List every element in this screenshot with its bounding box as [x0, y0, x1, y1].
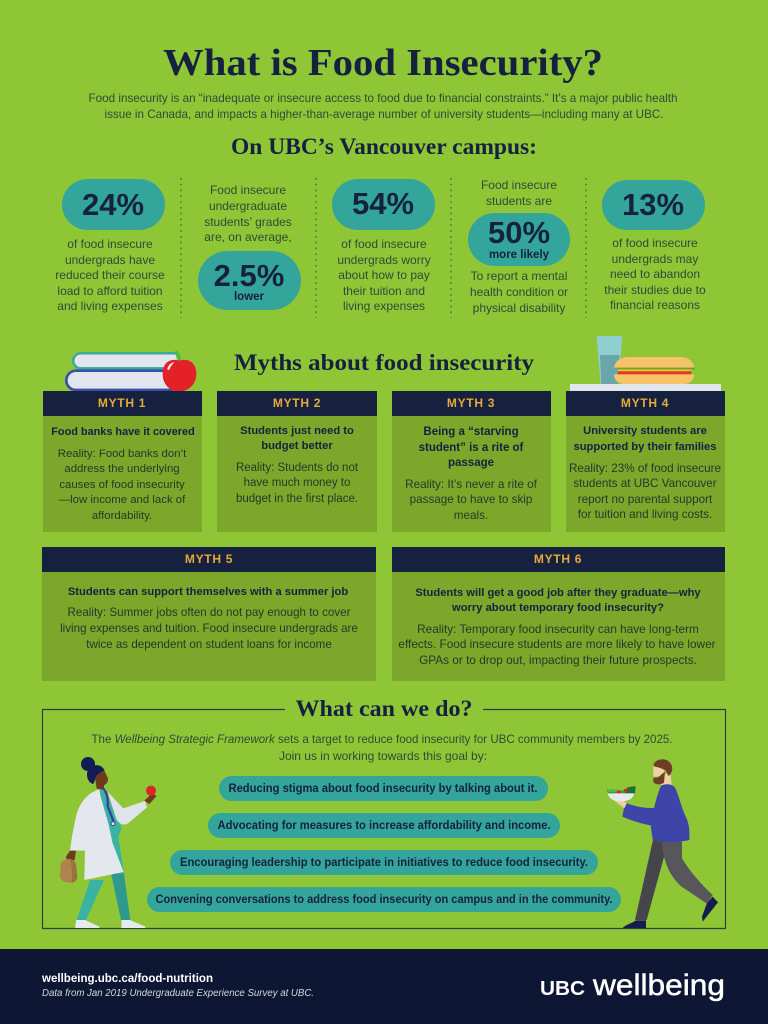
- panel: myth 3: MYTH 3: [447, 396, 495, 410]
- panel: myth 5: MYTH 5: [185, 552, 233, 566]
- stat: 2.5%: undergraduate: [209, 199, 287, 213]
- stat: 2.5%: students’ grades: [204, 215, 292, 229]
- action pill 2: Advocating for measures to increase affordability and income.: [218, 820, 550, 832]
- action pill 3: [170, 850, 598, 875]
- panel: myth 2: budget better: [261, 440, 333, 452]
- panel: myth 1: MYTH 1: [98, 396, 146, 410]
- panel: myth 2: have much money to: [244, 477, 350, 489]
- stat: 50%: Food insecure: [481, 178, 557, 192]
- stat: 24%: and living expenses: [57, 299, 163, 313]
- stat: 24%: undergrads have: [65, 253, 155, 267]
- stat: 13%: of food insecure: [612, 236, 698, 250]
- panel: myth 4: supported by their families: [574, 441, 716, 453]
- stat: 54%: living expenses: [343, 299, 425, 313]
- heading: what can we do: What can we do?: [296, 696, 472, 721]
- stat: 50%: 50%: [488, 215, 550, 250]
- intro text: issue in Canada, and impacts a higher-than-average number of university students—including many at UBC.: [104, 107, 664, 121]
- stat: 13%: 13%: [622, 187, 684, 222]
- stat: 2.5%: Food insecure: [210, 183, 286, 197]
- panel: myth 6: GPAs or to drop out, impacting their future prospects.: [419, 653, 697, 667]
- footer text: Data from Jan 2019 Undergraduate Experience Survey at UBC.: [42, 988, 314, 999]
- panel: myth 4: University students are: [583, 425, 707, 437]
- logo: UBC wellbeing: wellbeing: [592, 969, 725, 1002]
- stat: 2.5%: 2.5%: [214, 258, 284, 293]
- panel: myth 2: budget in the first place.: [236, 493, 358, 505]
- panel: myth 4: report no parental support: [578, 493, 713, 506]
- panel: myth 1: Reality: Food banks don’t: [58, 448, 187, 460]
- stat: 54%: [332, 179, 435, 313]
- logo: UBC wellbeing: [540, 969, 725, 1002]
- panel: myth 1: —low income and lack of: [59, 494, 186, 506]
- illustration: man carrying salad: [607, 759, 718, 928]
- action pill 2: [208, 813, 560, 838]
- action pill 4: [147, 887, 621, 912]
- panel: myth 3: passage to have to skip: [410, 493, 533, 506]
- icon: books and apple: [66, 350, 196, 391]
- stat: 13%: need to abandon: [610, 267, 700, 281]
- stat: 24%: of food insecure: [67, 237, 153, 251]
- panel: myth 3: [392, 391, 551, 532]
- stat: 13%: undergrads may: [612, 252, 698, 266]
- action pill 1: Reducing stigma about food insecurity by talking about it.: [228, 783, 538, 795]
- stat: 13%: [602, 180, 706, 312]
- heading: campus: On UBC’s Vancouver campus:: [231, 134, 537, 159]
- panel: myth 1: affordability.: [92, 510, 152, 522]
- panel: myth 3: Being a “starving: [423, 426, 519, 438]
- text: framework intro: The Wellbeing Strategic Framework sets a target to reduce food insecurity for UBC community members by 2025.: [92, 732, 672, 746]
- panel: myth 5: [42, 547, 376, 681]
- action pill 3: Encouraging leadership to participate in initiatives to reduce food insecurity.: [180, 857, 588, 869]
- stat: 50%: health condition or: [470, 285, 568, 299]
- stat: 50%: [468, 178, 570, 315]
- panel frame: what can we do: [42, 710, 726, 928]
- text: framework intro: Join us in working towards this goal by:: [279, 749, 487, 763]
- illustration: woman in lab coat: [60, 757, 157, 928]
- panel: myth 1: Food banks have it covered: [51, 426, 195, 438]
- panel: myth 6: effects. Food insecure students are more likely to have lower: [398, 637, 716, 651]
- stat: 24%: [55, 179, 165, 313]
- stat: 50%: physical disability: [473, 301, 565, 315]
- stat: 50%: To report a mental: [471, 269, 567, 283]
- panel: myth 2: Students just need to: [240, 425, 354, 437]
- panel: myth 3: student” is a rite of: [419, 442, 524, 454]
- stat: 13%: financial reasons: [610, 298, 700, 312]
- panel: myth 3: meals.: [454, 509, 488, 522]
- stat: 50%: more likely: [489, 249, 550, 261]
- intro text: [88, 91, 678, 121]
- stat: 54%: 54%: [352, 186, 414, 221]
- panel: myth 3: passage: [448, 457, 494, 469]
- panel: myth 4: [566, 391, 725, 532]
- intro text: Food insecurity is an “inadequate or insecure access to food due to financial constraints.” It’s a major public health: [88, 91, 678, 105]
- panel: myth 4: Reality: 23% of food insecure: [569, 462, 721, 475]
- stat: 54%: undergrads worry: [337, 253, 431, 267]
- title: What is Food Insecurity?: [163, 42, 603, 84]
- panel: myth 6: Reality: Temporary food insecurity can have long-term: [417, 622, 699, 636]
- panel: myth 4: for tuition and living costs.: [578, 508, 712, 521]
- panel: myth 4: students at UBC Vancouver: [573, 477, 717, 490]
- panel: myth 1: causes of food insecurity: [59, 479, 185, 491]
- panel: myth 5: Reality: Summer jobs often do not pay enough to cover: [68, 606, 351, 619]
- footer text: [41, 971, 314, 999]
- stat: 24%: reduced their course: [55, 268, 165, 282]
- panel: myth 4: MYTH 4: [621, 396, 669, 410]
- panel: myth 1: [43, 391, 202, 532]
- panel: myth 5: Students can support themselves with a summer job: [68, 586, 348, 598]
- panel: myth 5: living expenses and tuition. Food insecure undergrads are: [60, 622, 358, 635]
- stat: 54%: their tuition and: [343, 284, 425, 298]
- stat: 24%: load to afford tuition: [57, 284, 163, 298]
- action pill 1: [219, 776, 548, 801]
- panel: myth 2: MYTH 2: [273, 396, 321, 410]
- panel: myth 6: MYTH 6: [534, 552, 582, 566]
- panel: myth 2: [217, 391, 377, 532]
- stat: 2.5%: lower: [234, 291, 265, 303]
- panel: myth 1: address the underlying: [64, 463, 180, 475]
- logo: UBC wellbeing: UBC: [540, 978, 585, 1000]
- panel: myth 6: worry about temporary food insecurity?: [451, 602, 664, 614]
- heading: myths: Myths about food insecurity: [234, 350, 535, 375]
- footer band: [0, 949, 768, 1024]
- stat: 13%: their studies due to: [604, 283, 706, 297]
- text: framework intro: [92, 732, 672, 763]
- panel: myth 3: Reality: It’s never a rite of: [405, 478, 538, 491]
- icon: glass and sandwich: [570, 336, 721, 391]
- stat: 2.5%: [198, 183, 301, 310]
- panel: myth 5: twice as dependent on student loans for income: [86, 638, 332, 651]
- stat: 54%: about how to pay: [338, 268, 430, 282]
- stat: 2.5%: are, on average,: [204, 230, 292, 244]
- stat: 24%: 24%: [82, 187, 144, 222]
- panel: myth 6: [392, 547, 725, 681]
- panel: myth 6: Students will get a good job after they graduate—why: [415, 587, 701, 599]
- stat: 54%: of food insecure: [341, 237, 427, 251]
- panel: myth 2: Reality: Students do not: [236, 462, 359, 474]
- action pill 4: Convening conversations to address food insecurity on campus and in the community.: [156, 894, 612, 906]
- footer text: wellbeing.ubc.ca/food-nutrition: [41, 971, 213, 985]
- stat: 50%: students are: [486, 194, 552, 208]
